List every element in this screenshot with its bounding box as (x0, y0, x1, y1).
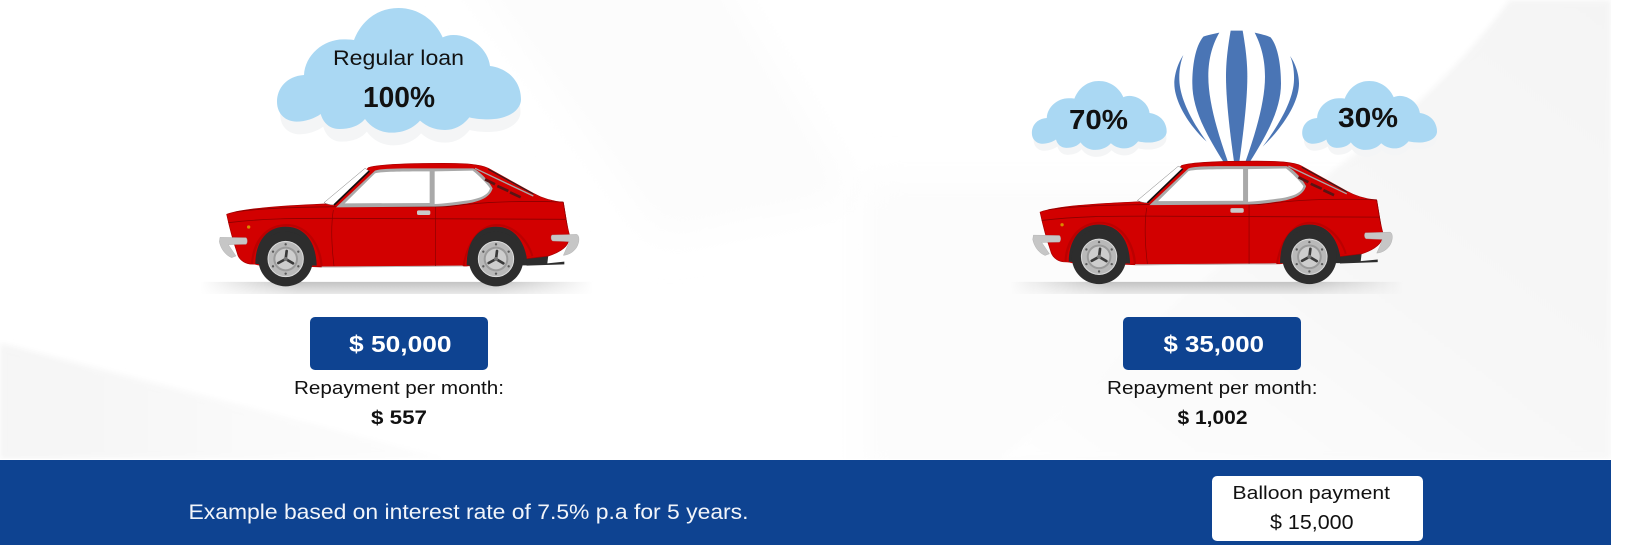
repayment label: Repayment per month: (294, 378, 504, 398)
button: loan amount (1123, 317, 1301, 370)
panel: balloon loan (1010, 31, 1437, 429)
repayment amount: $ 557 (371, 408, 427, 429)
callout: balloon payment: $ 15,000 (1270, 512, 1354, 534)
footer band (0, 460, 1611, 545)
illustration: red car (219, 163, 579, 286)
repayment label: Repayment per month: (1107, 378, 1318, 398)
panel: regular loan (200, 8, 593, 429)
cloud: regular loan 100% (277, 8, 521, 145)
cloud: 70 percent: 70% (1069, 104, 1128, 135)
cloud: 30 percent (1302, 81, 1437, 157)
callout: balloon payment: Balloon payment (1232, 483, 1390, 503)
button: loan amount: $ 50,000 (349, 331, 452, 357)
callout: balloon payment (1212, 476, 1423, 541)
cloud percentage: 100% (363, 82, 435, 114)
button: loan amount: $ 35,000 (1164, 331, 1264, 357)
ground shadow under car (200, 282, 593, 294)
button: loan amount (310, 317, 488, 370)
cloud: 30 percent: 30% (1338, 102, 1398, 133)
footnote text: Example based on interest rate of 7.5% p.a for 5 years. (188, 501, 748, 524)
ground shadow under car (1010, 282, 1403, 294)
illustration: red car (1033, 161, 1392, 284)
icon: hot air balloon (1174, 31, 1299, 162)
cloud: 70 percent (1032, 81, 1167, 157)
repayment amount: $ 1,002 (1178, 408, 1248, 429)
cloud label: Regular loan (333, 47, 464, 70)
